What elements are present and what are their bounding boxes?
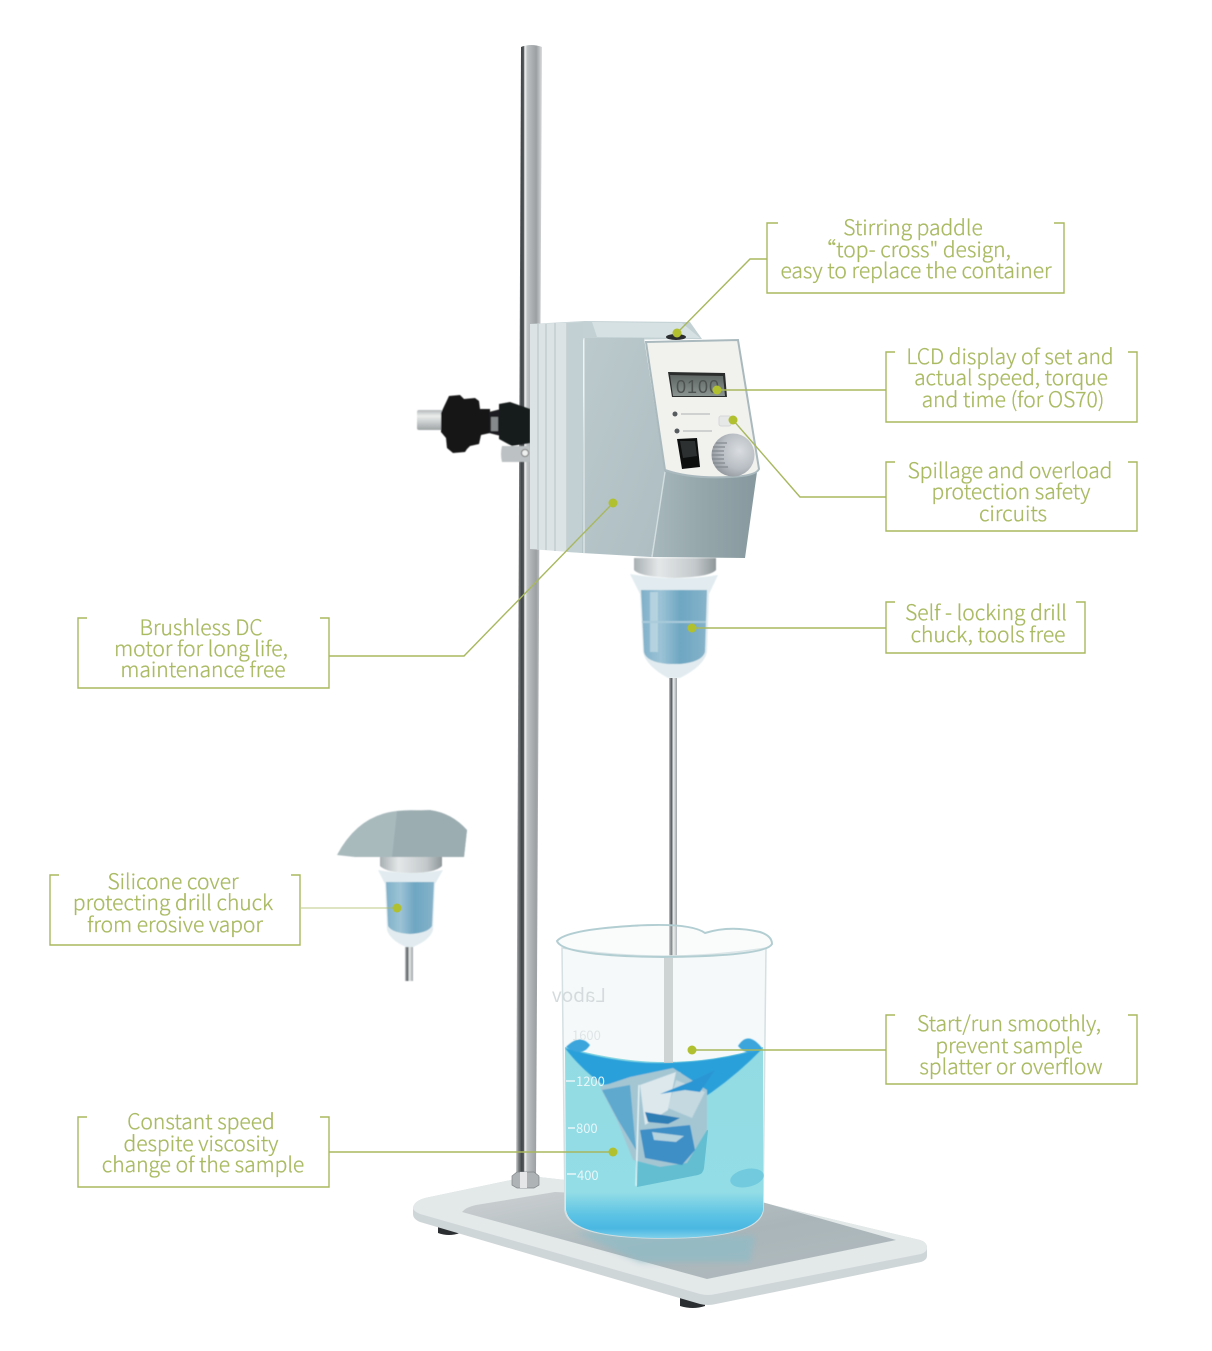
callout: constant speed xyxy=(78,1106,618,1187)
control panel xyxy=(646,340,759,477)
callout: LCD display: and time (for OS70) xyxy=(922,384,1104,414)
motor top cover xyxy=(530,321,702,340)
submerged shaft xyxy=(664,958,673,1063)
graduation labels: Labov xyxy=(552,981,606,1008)
callout: silicone cover xyxy=(50,866,402,945)
speed knob xyxy=(712,434,754,476)
callout: constant speed: despite viscosity xyxy=(124,1128,278,1158)
callout: protection circuits: protection safety xyxy=(932,476,1090,506)
stand: vertical rod xyxy=(512,45,542,1188)
control panel: 0100 xyxy=(676,377,720,397)
callout: brushless motor: maintenance free xyxy=(120,654,286,684)
callout: smooth start: Start/run smoothly, xyxy=(917,1008,1101,1038)
callout: silicone cover: from erosive vapor xyxy=(87,909,263,939)
callout: stirring paddle: easy to replace the container xyxy=(780,255,1052,285)
graduation labels: 400 xyxy=(577,1165,599,1184)
cooling fins xyxy=(530,322,583,553)
callout: stirring paddle xyxy=(672,212,1064,338)
callout: LCD display xyxy=(712,341,1137,422)
callout: protection circuits: circuits xyxy=(979,498,1047,528)
power switch xyxy=(677,438,700,469)
motor housing xyxy=(530,321,759,558)
callout: silicone cover: Silicone cover xyxy=(107,866,239,896)
callout: constant speed: Constant speed xyxy=(127,1106,275,1136)
callout: smooth start: prevent sample xyxy=(935,1030,1083,1060)
lower front xyxy=(651,470,757,558)
spare chuck with silicone cover xyxy=(337,810,467,981)
callout: protection circuits xyxy=(728,416,1137,531)
callout: LCD display: actual speed, torque xyxy=(914,362,1108,392)
glass body xyxy=(562,948,766,1238)
stirrer shaft xyxy=(669,678,677,1058)
callout: protection circuits: Spillage and overload xyxy=(908,455,1112,485)
callout: drill chuck: chuck, tools free xyxy=(911,619,1065,649)
callout: drill chuck: Self - locking drill xyxy=(905,597,1067,627)
stirring paddle xyxy=(635,1130,708,1187)
callout: stirring paddle: “top- cross" design, xyxy=(815,234,1011,264)
side panel xyxy=(582,338,665,557)
clamp knob and holder xyxy=(417,395,530,462)
graduation labels: 1600 xyxy=(572,1025,601,1044)
callout: smooth start: splatter or overflow xyxy=(919,1051,1103,1081)
callout: LCD display: LCD display of set and xyxy=(906,341,1114,371)
callout: constant speed: change of the sample xyxy=(102,1149,304,1179)
callout: smooth start xyxy=(688,1008,1137,1084)
callout: brushless motor xyxy=(78,498,618,688)
graduation labels xyxy=(552,981,606,1184)
stand: base plate xyxy=(413,1176,927,1308)
callout: brushless motor: Brushless DC xyxy=(139,612,263,642)
rim xyxy=(557,925,772,957)
callout: stirring paddle: Stirring paddle xyxy=(843,212,983,242)
callout: drill chuck xyxy=(688,597,1085,653)
vortex xyxy=(565,1038,763,1186)
callout: brushless motor: motor for long life, xyxy=(114,633,288,663)
callout: silicone cover: protecting drill chuck xyxy=(73,887,273,917)
graduation labels: 1200 xyxy=(576,1071,605,1090)
water xyxy=(565,1047,763,1238)
drill chuck and silicone cup xyxy=(630,558,718,678)
beaker with blue liquid xyxy=(552,925,772,1238)
graduation labels: 800 xyxy=(576,1118,598,1137)
